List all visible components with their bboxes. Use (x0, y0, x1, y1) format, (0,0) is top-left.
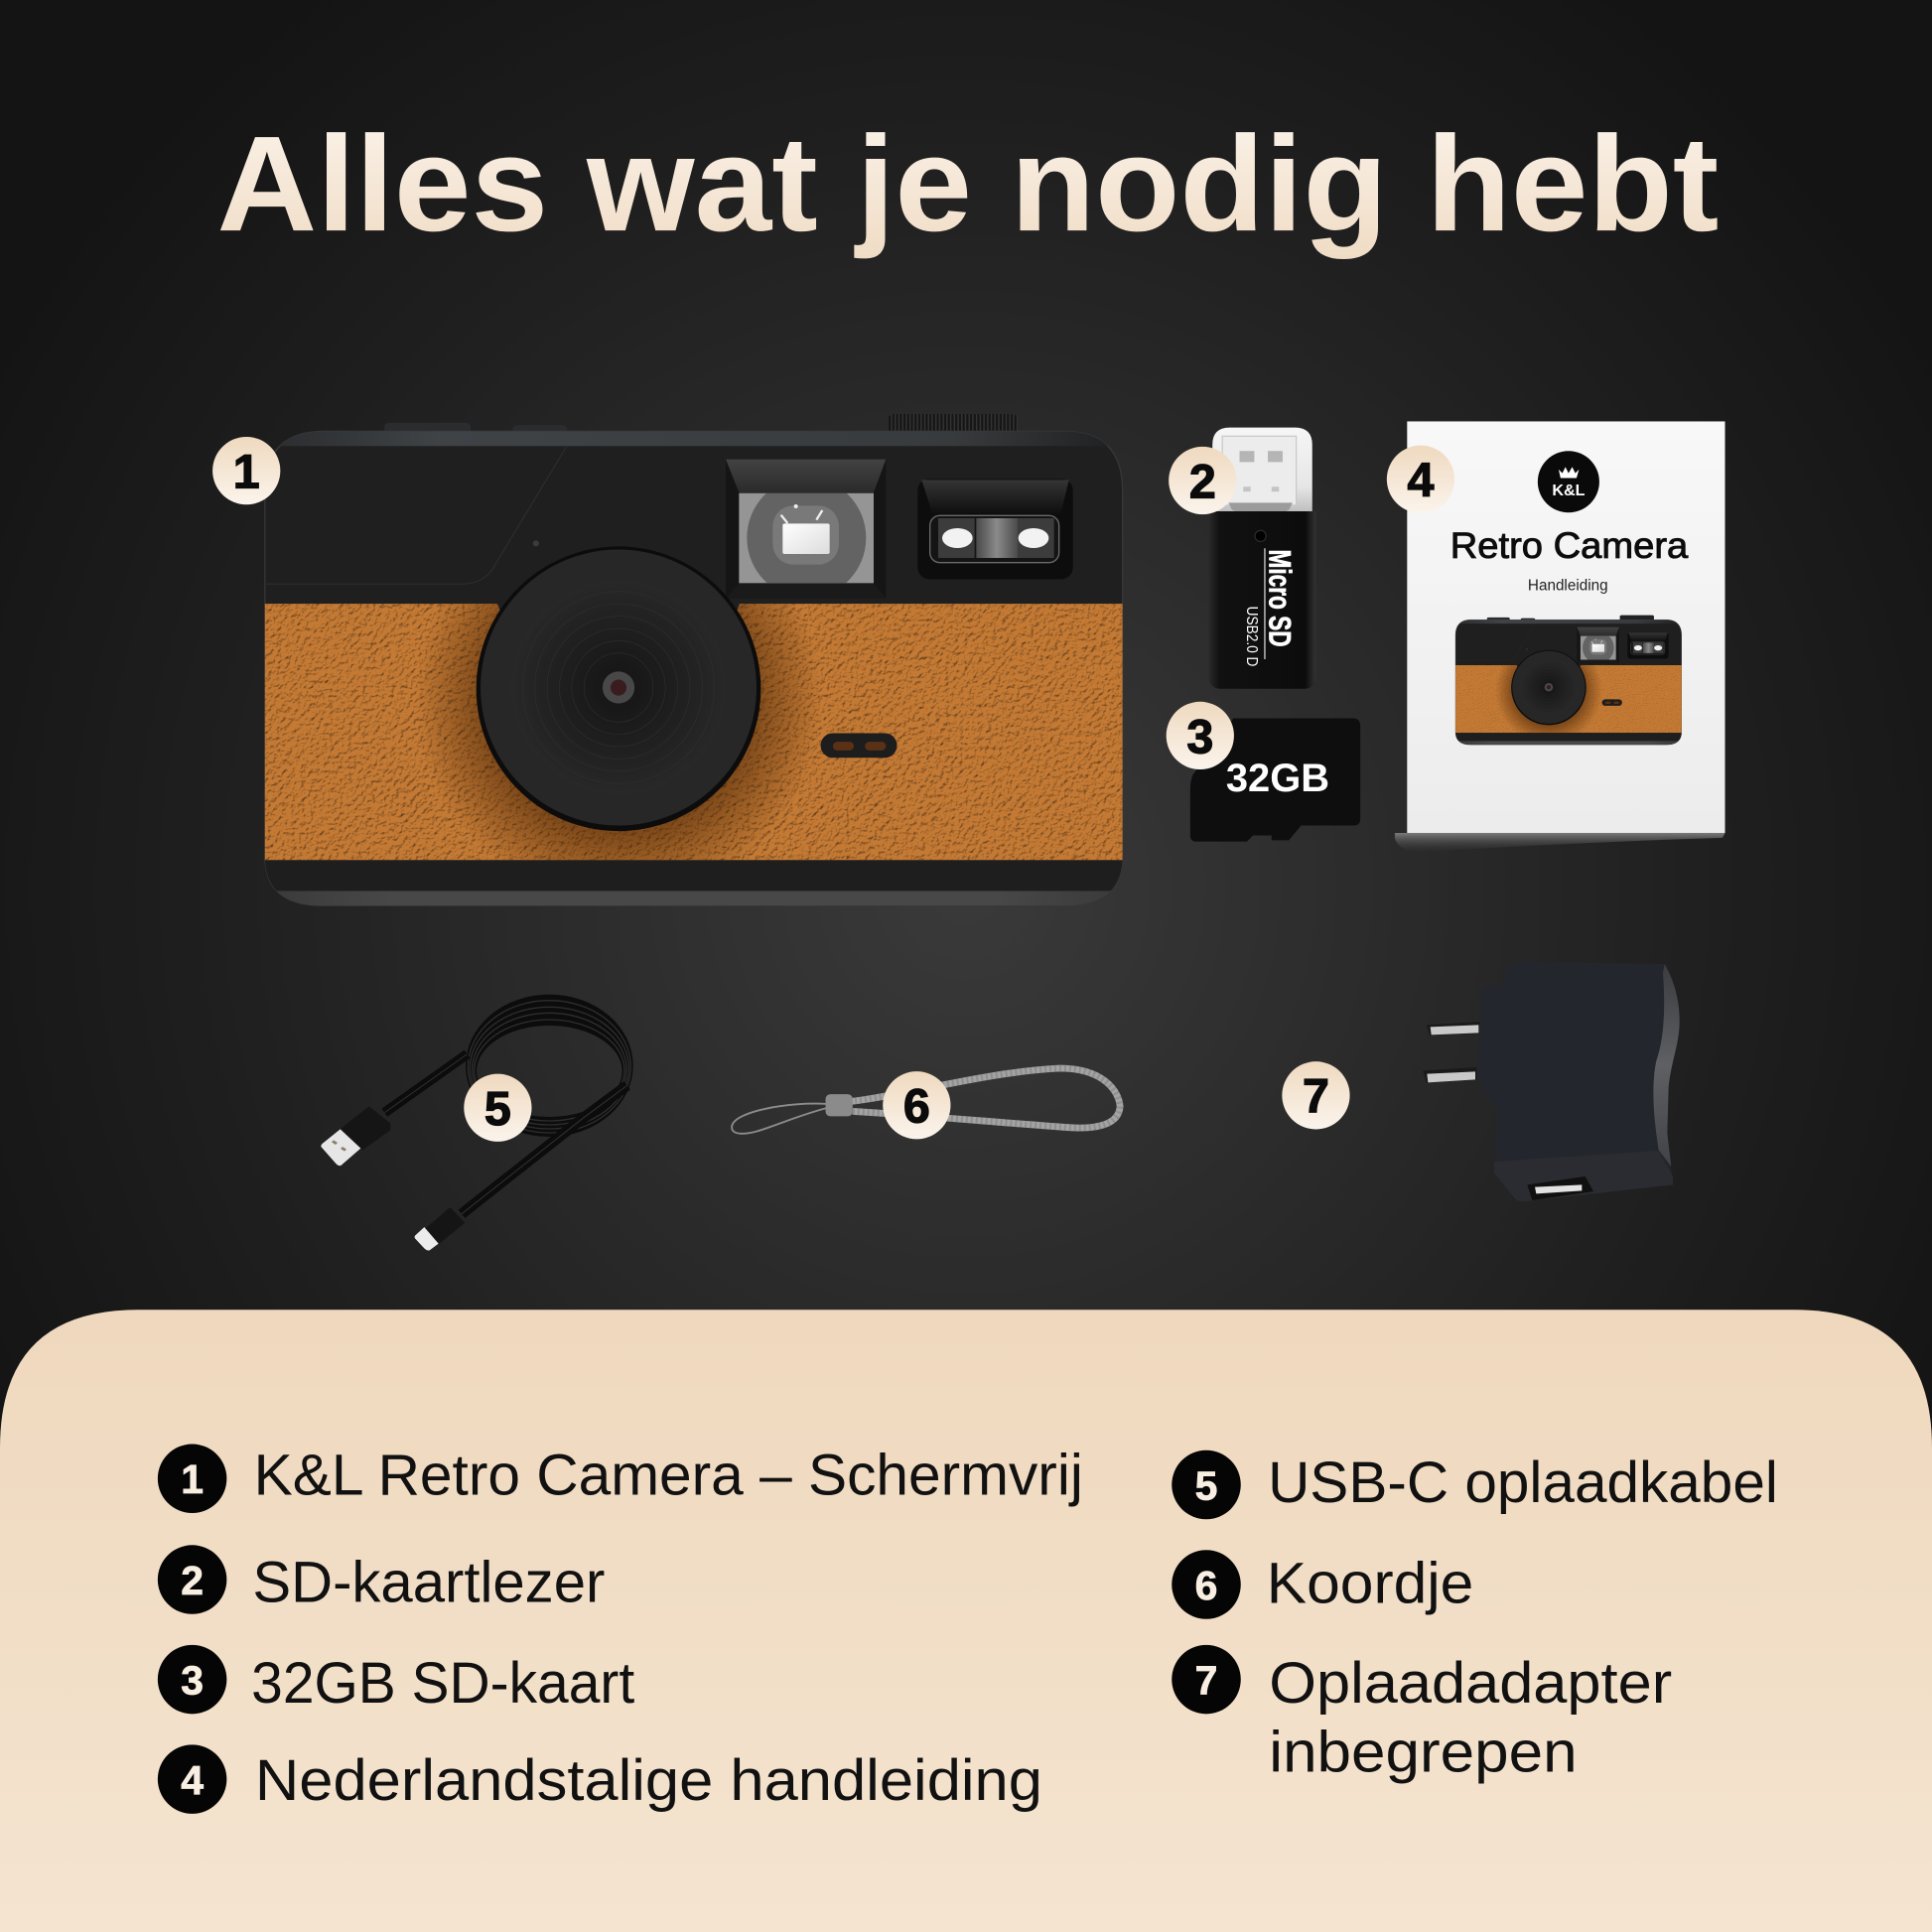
item 3: 3 (181, 1657, 204, 1703)
wrist strap (732, 1068, 1120, 1134)
leather wrap (265, 602, 1123, 860)
item 7: 7 (1195, 1657, 1217, 1703)
badge 3: 3 (1186, 710, 1213, 763)
viewfinder window (726, 460, 886, 599)
camera body (265, 431, 1123, 905)
rangefinder window (917, 479, 1073, 579)
cable strand to usb-c (462, 1085, 627, 1214)
cable coil (466, 995, 633, 1137)
title: Alles wat je nodig hebt (216, 107, 1719, 259)
usb plug (1212, 428, 1312, 516)
panel: item list (0, 1310, 1932, 1932)
adapter body (1477, 962, 1680, 1201)
panel background (0, 1310, 1932, 1932)
item 6 (1172, 1550, 1473, 1619)
top panel seam (265, 446, 567, 584)
badge 4: 4 (1407, 454, 1434, 507)
item 4: 4 (181, 1757, 204, 1803)
manual shadow (1395, 833, 1725, 853)
camera body details (265, 431, 1123, 905)
adapter bottom lip (1494, 1151, 1673, 1201)
strap bead (826, 1094, 853, 1116)
strap loop (850, 1068, 1120, 1128)
manual subtitle: Handleiding (1528, 576, 1608, 594)
strap thin cord (732, 1104, 828, 1134)
badge 5 (464, 1074, 532, 1142)
item 6: 6 (1195, 1563, 1217, 1608)
reader print: Micro SD (1262, 550, 1297, 647)
bottom strip (265, 891, 1123, 905)
usb-c cable (321, 995, 633, 1250)
item 1: K&L Retro Camera – Schermvrij (254, 1443, 1083, 1507)
manual logo: K&L (1552, 482, 1586, 499)
item 2: SD-kaartlezer (252, 1550, 605, 1614)
item 1: 1 (181, 1456, 204, 1502)
badge 5: 5 (484, 1082, 511, 1136)
lower black band (265, 860, 1123, 891)
manual (1395, 421, 1725, 853)
manual logo (1538, 451, 1599, 512)
badge 7 (1282, 1061, 1350, 1129)
badge 6: 6 (903, 1080, 930, 1134)
card capacity: 32GB (1226, 757, 1329, 800)
reader hole (1255, 530, 1266, 541)
item 5: USB-C oplaadkabel (1268, 1450, 1778, 1515)
adapter pins (1423, 1022, 1480, 1083)
item 7: Oplaadadapter (1269, 1651, 1672, 1716)
badge 1: 1 (233, 445, 260, 498)
item 6: Koordje (1267, 1552, 1473, 1616)
manual page (1407, 421, 1725, 833)
top strip (265, 431, 1123, 446)
item 7: inbegrepen (1269, 1721, 1578, 1785)
item 4: Nederlandstalige handleiding (255, 1748, 1042, 1813)
cable strand to usb-a (384, 1054, 468, 1113)
usb-a plug (321, 1106, 390, 1166)
usb-c plug (415, 1207, 465, 1250)
badge 2 (1169, 447, 1236, 514)
item 2: 2 (181, 1558, 204, 1603)
reader print: USB2.0 D (1243, 607, 1261, 666)
shutter dot (533, 540, 539, 546)
manual camera image (1455, 616, 1682, 745)
speaker slot (821, 733, 897, 758)
memory card (1190, 719, 1360, 842)
badge 6 (883, 1071, 950, 1139)
adapter side edge (1653, 964, 1680, 1167)
manual title: Retro Camera (1450, 524, 1689, 566)
badge 4 (1387, 446, 1454, 513)
adapter usb port (1527, 1176, 1593, 1200)
camera (265, 414, 1123, 905)
top buttons and dial (384, 414, 1018, 431)
badge 3 (1167, 702, 1234, 769)
reader body (1208, 511, 1315, 689)
badge 7: 7 (1303, 1070, 1329, 1124)
item 5: 5 (1195, 1462, 1217, 1508)
lens (477, 546, 760, 831)
badge 2: 2 (1189, 455, 1216, 508)
power adapter (1423, 962, 1680, 1201)
item 3: 32GB SD-kaart (251, 1651, 634, 1716)
reader print (1243, 548, 1297, 666)
badge 1 (212, 437, 280, 504)
card reader (1208, 428, 1315, 689)
item 7 (1172, 1645, 1672, 1785)
